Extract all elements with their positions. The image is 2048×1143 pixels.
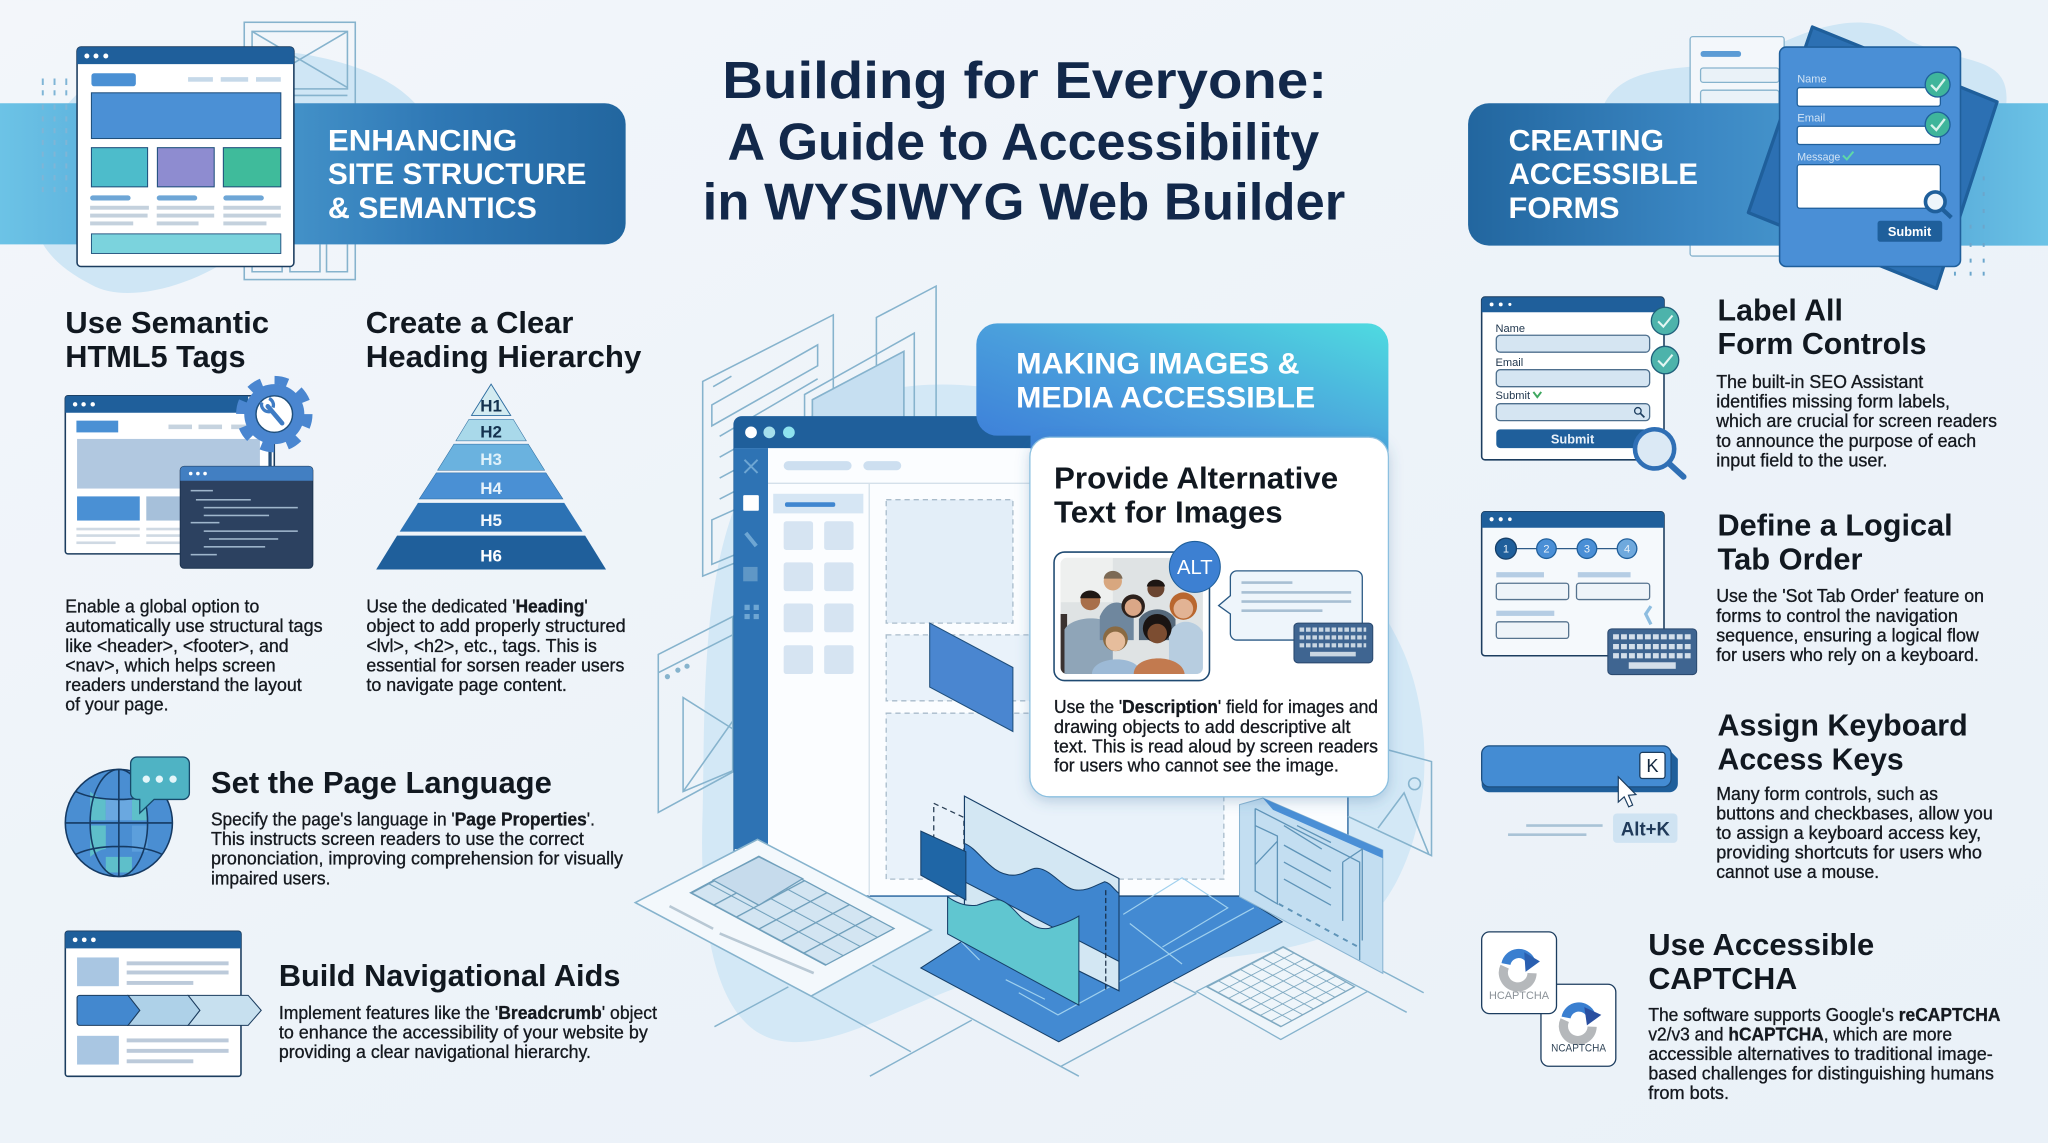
- header text: [328, 124, 586, 225]
- body text: prononciation, improving comprehension for visually: [211, 849, 623, 869]
- form mockup: Message: [1797, 152, 1840, 164]
- wireframes behind window: [658, 286, 936, 812]
- pyramid: H1: [480, 396, 502, 415]
- form mockup: Name: [1797, 73, 1827, 85]
- title: A Guide to Accessibility: [728, 113, 1319, 171]
- icon: tab order form: 3: [1584, 544, 1590, 556]
- body text: Use the dedicated 'Heading': [366, 597, 588, 617]
- wireframe behind window: [244, 22, 355, 280]
- icon: tab order form: 4: [1624, 544, 1630, 556]
- heading: [366, 305, 641, 374]
- body text: automatically use structural tags: [65, 616, 323, 636]
- body text: <nav>, which helps screen: [65, 655, 276, 675]
- panel: navigational aids: [65, 931, 657, 1076]
- body text: cannot use a mouse.: [1716, 862, 1879, 882]
- pyramid: H5: [480, 511, 502, 530]
- pyramid: H2: [480, 423, 502, 442]
- body text: [1716, 586, 1984, 665]
- icon: globe with chat bubble: [65, 757, 189, 876]
- banner text: MEDIA ACCESSIBLE: [1016, 382, 1315, 415]
- icon: ALT badge: ALT: [1177, 557, 1213, 579]
- header band: [0, 103, 626, 244]
- body text: forms to control the navigation: [1716, 606, 1958, 626]
- photo of diverse group: [1054, 552, 1209, 681]
- heading: Form Controls: [1718, 326, 1927, 361]
- heading: [1648, 927, 1874, 996]
- header text: FORMS: [1509, 192, 1620, 225]
- title: Building for Everyone:: [722, 52, 1327, 110]
- heading: Assign Keyboard: [1718, 707, 1968, 742]
- panel: accessible forms header: [1468, 22, 2048, 288]
- light blob behind illustration: [702, 385, 1424, 1042]
- light blob behind form: [1604, 22, 2007, 105]
- heading: [1718, 293, 1927, 361]
- form mockup: Submit: [1888, 224, 1932, 239]
- heading: Use Semantic: [65, 305, 269, 340]
- banner text: [1016, 348, 1315, 415]
- body text: [65, 597, 323, 715]
- banner text: MAKING IMAGES &: [1016, 348, 1300, 381]
- heading: Label All: [1718, 293, 1843, 328]
- icon: page with gear and code: [65, 380, 313, 568]
- icon: ALT badge: [1169, 541, 1220, 592]
- body text: object to add properly structured: [366, 616, 626, 636]
- dot grid: [42, 78, 67, 192]
- panel: accessible CAPTCHA: [1482, 927, 2000, 1103]
- section banner: [976, 323, 1388, 470]
- header text: ACCESSIBLE: [1509, 158, 1698, 191]
- header text: [1509, 124, 1698, 225]
- title: [703, 52, 1345, 232]
- form mockup: [1780, 47, 1960, 267]
- toolbar: [784, 461, 852, 470]
- header text: SITE STRUCTURE: [328, 158, 586, 191]
- code window: [180, 466, 313, 568]
- card body text: Use the 'Description' field for images and: [1054, 697, 1378, 717]
- card heading: Provide Alternative: [1054, 461, 1338, 496]
- icon: hCAPTCHA card: HCAPTCHA: [1489, 990, 1550, 1002]
- body text: providing shortcuts for users who: [1716, 842, 1982, 862]
- card body text: [1054, 697, 1378, 775]
- icon: gear with wrench: [240, 380, 308, 448]
- panel: central builder illustration: [635, 286, 1432, 1076]
- header band: [1468, 103, 2048, 246]
- body text: for users who rely on a keyboard.: [1716, 645, 1979, 665]
- heading: Heading Hierarchy: [366, 339, 641, 374]
- heading: Set the Page Language: [211, 765, 552, 800]
- icon: button with access key: [1482, 746, 1678, 843]
- panel: site structure header: [0, 22, 626, 293]
- panel: tab order: [1482, 508, 1984, 675]
- panel: label form controls: [1482, 293, 1997, 477]
- panel: semantic tags: [65, 305, 323, 715]
- body text: [211, 810, 623, 888]
- panel: page language: [65, 757, 623, 888]
- heading: [1718, 508, 1953, 577]
- wireframe form behind: [1690, 37, 1784, 256]
- floating wave panels: [921, 796, 1119, 1005]
- body text: to enhance the accessibility of your website by: [279, 1022, 648, 1042]
- body text: v2/v3 and hCAPTCHA, which are more: [1648, 1024, 1952, 1044]
- isometric right window: [1240, 798, 1383, 973]
- body text: This instructs screen readers to use the correct: [211, 829, 584, 849]
- title: in WYSIWYG Web Builder: [703, 174, 1345, 232]
- floor grid lines: [714, 901, 1424, 1076]
- pyramid: H4: [480, 479, 503, 498]
- isometric grid: [1196, 947, 1368, 1039]
- body text: sequence, ensuring a logical flow: [1716, 625, 1980, 645]
- image wireframe: [1348, 742, 1432, 856]
- icon: keyboard: [1294, 623, 1373, 663]
- icon: nCAPTCHA card: NCAPTCHA: [1551, 1042, 1607, 1054]
- body text: The built-in SEO Assistant: [1716, 372, 1923, 392]
- back card: [1748, 27, 1997, 288]
- icon: tab order form: [1482, 512, 1697, 675]
- body text: [1716, 784, 1993, 882]
- light blob behind header: [34, 47, 434, 293]
- card: alternative text: [1030, 437, 1388, 797]
- body text: Enable a global option to: [65, 597, 259, 617]
- icon: breadcrumb window: [65, 931, 261, 1076]
- body text: to assign a keyboard access key,: [1716, 823, 1981, 843]
- icon: labelled form: Name: [1496, 323, 1525, 335]
- body text: Use the 'Sot Tab Order' feature on: [1716, 586, 1984, 606]
- card heading: Text for Images: [1054, 495, 1283, 530]
- body text: [366, 597, 626, 695]
- body text: [1715, 372, 1997, 470]
- card body text: drawing objects to add descriptive alt: [1054, 717, 1351, 737]
- panel: heading hierarchy: [366, 305, 641, 695]
- window mockup: [77, 47, 294, 267]
- body text: of your page.: [65, 695, 168, 715]
- body text: impaired users.: [211, 868, 330, 888]
- body text: The software supports Google's reCAPTCHA: [1648, 1005, 2000, 1025]
- pyramid: H6: [480, 547, 502, 566]
- body text: Specify the page's language in 'Page Properties'.: [211, 810, 595, 830]
- icon: labelled form: Email: [1496, 357, 1523, 369]
- body text: essential for sorsen reader users: [366, 655, 624, 675]
- header text: ENHANCING: [328, 124, 517, 157]
- body text: readers understand the layout: [65, 675, 302, 695]
- heading: CAPTCHA: [1648, 961, 1797, 996]
- icon: labelled form: Submit: [1551, 431, 1595, 446]
- body text: which are crucial for screen readers: [1715, 411, 1997, 431]
- heading: Build Navigational Aids: [279, 958, 620, 993]
- panel: keyboard access keys: [1482, 707, 1993, 882]
- heading: Tab Order: [1718, 542, 1863, 577]
- body text: <lvl>, <h2>, etc., tags. This is: [366, 636, 597, 656]
- form mockup: Email: [1797, 113, 1825, 125]
- icon: labelled form: [1482, 297, 1684, 477]
- body text: to navigate page content.: [366, 675, 567, 695]
- heading: Use Accessible: [1648, 927, 1874, 962]
- blueprint floor: [921, 878, 1282, 1042]
- heading: Access Keys: [1718, 741, 1904, 776]
- dashed layout boxes: [886, 500, 1224, 879]
- blue floating block: [930, 623, 1013, 732]
- widget grid: [784, 521, 854, 674]
- heading: Create a Clear: [366, 305, 573, 340]
- body text: buttons and checkbases, allow you: [1716, 804, 1993, 824]
- dot grid: [1954, 176, 1985, 276]
- pyramid: [376, 384, 606, 570]
- header text: CREATING: [1509, 124, 1664, 157]
- card heading: [1054, 461, 1338, 530]
- main editor window: [734, 417, 1348, 896]
- heading: [1718, 707, 1968, 776]
- icon: button with access key: K: [1646, 755, 1659, 776]
- icon: nCAPTCHA card: [1541, 984, 1616, 1066]
- icon: hCAPTCHA card: [1482, 932, 1557, 1014]
- icon: labelled form: Submit: [1496, 390, 1530, 402]
- body text: from bots.: [1648, 1083, 1729, 1103]
- body text: to announce the purpose of each: [1716, 431, 1976, 451]
- card body text: for users who cannot see the image.: [1054, 755, 1339, 775]
- header text: & SEMANTICS: [328, 192, 537, 225]
- body text: identifies missing form labels,: [1716, 392, 1950, 412]
- icon: tab order form: 1: [1503, 544, 1509, 556]
- icon: tab order form: 2: [1543, 544, 1550, 556]
- body text: based challenges for distinguishing humans: [1648, 1064, 1994, 1084]
- body text: [279, 1003, 657, 1062]
- body text: Implement features like the 'Breadcrumb' object: [279, 1003, 657, 1023]
- icon: button with access key: Alt+K: [1621, 818, 1670, 840]
- heading: HTML5 Tags: [65, 339, 246, 374]
- body text: accessible alternatives to traditional image-: [1648, 1044, 1993, 1064]
- sidebar: [734, 448, 768, 849]
- body text: input field to the user.: [1716, 450, 1887, 470]
- isometric keyboard sheet: [635, 839, 931, 996]
- body text: [1648, 1005, 2000, 1103]
- body text: Many form controls, such as: [1716, 784, 1938, 804]
- speech bubble: [1219, 571, 1362, 640]
- card body text: text. This is read aloud by screen readers: [1054, 736, 1378, 756]
- heading: [65, 305, 269, 374]
- body text: providing a clear navigational hierarchy.: [279, 1042, 591, 1062]
- body text: like <header>, <footer>, and: [65, 636, 289, 656]
- pyramid: H3: [480, 450, 502, 469]
- heading: Define a Logical: [1718, 508, 1953, 543]
